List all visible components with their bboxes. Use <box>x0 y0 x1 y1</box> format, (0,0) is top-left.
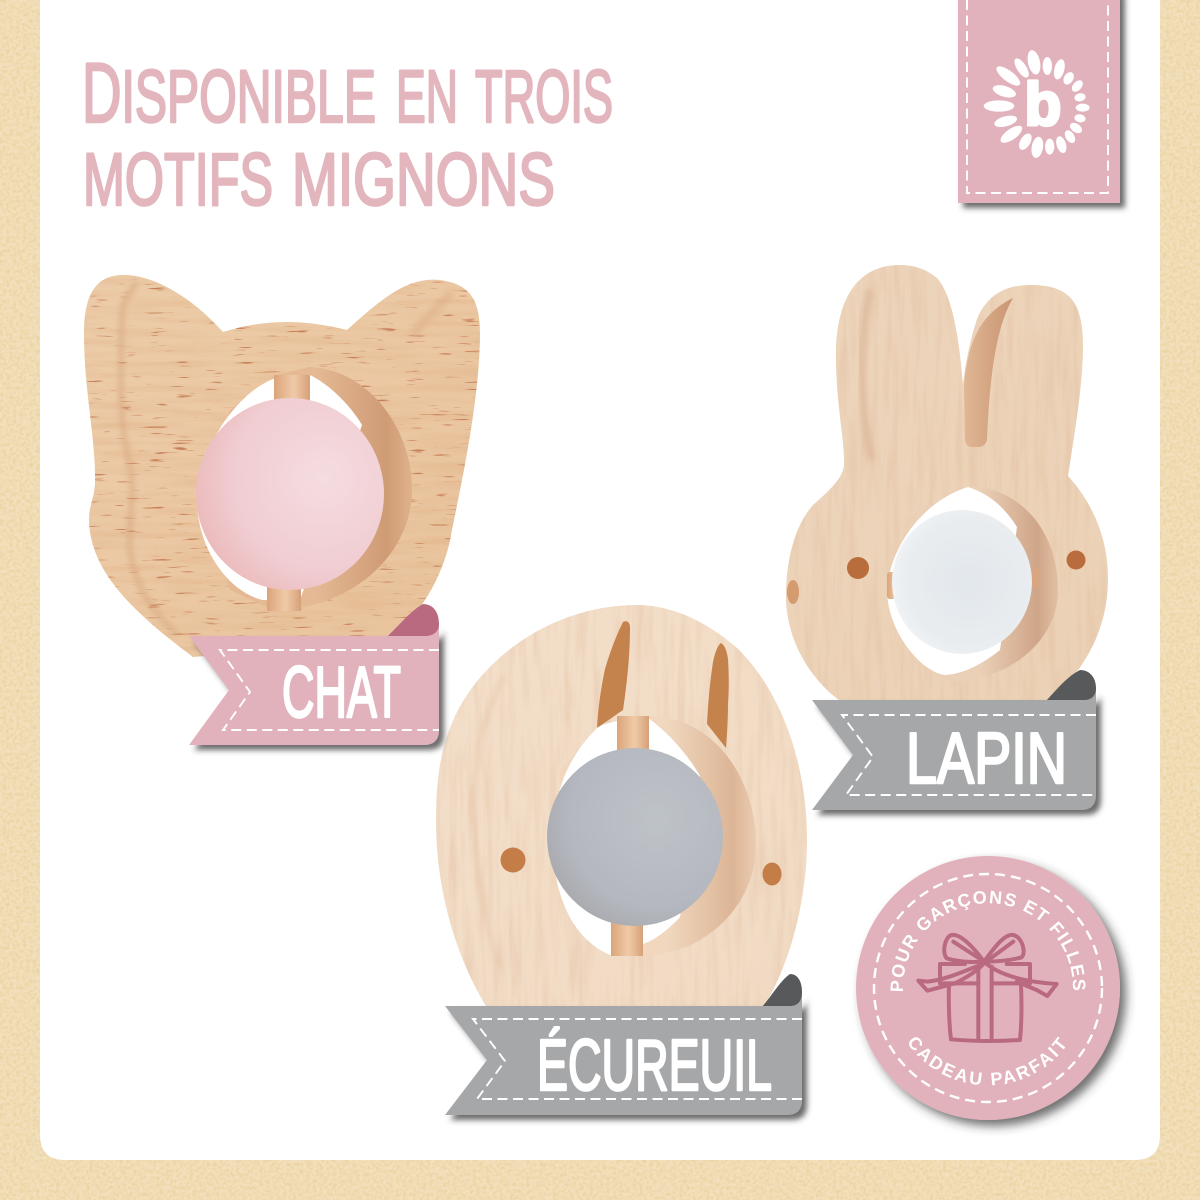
cat ear shading <box>412 292 452 335</box>
squirrel ball <box>547 748 723 926</box>
label: chat <box>189 604 439 745</box>
squirrel hole bevel <box>560 716 756 956</box>
label: lapin <box>812 670 1096 810</box>
ribbon fold <box>1046 670 1096 704</box>
badge: cadeau parfait <box>854 854 1134 1134</box>
ribbon fold <box>762 974 802 1008</box>
squirrel eyes <box>500 848 526 872</box>
product: rabbit rattle <box>786 265 1108 703</box>
label: lapin: LAPIN <box>906 719 1067 799</box>
product: cat rattle <box>84 275 480 657</box>
title: DISPONIBLE <box>82 46 376 140</box>
cat side edge shading <box>121 283 177 633</box>
squirrel rim <box>473 676 503 968</box>
title: MOTIFS <box>83 138 273 221</box>
ribbon fold <box>387 604 439 640</box>
cat ball <box>196 398 384 590</box>
product: squirrel rattle <box>436 605 807 1008</box>
squirrel ear marks <box>597 621 630 728</box>
ribbon <box>445 992 802 1115</box>
cat hole bevel <box>200 367 412 610</box>
logo tag <box>958 0 1120 203</box>
squirrel dowel <box>617 716 649 766</box>
label: chat: CHAT <box>282 653 401 733</box>
rabbit left ear shading <box>862 290 872 460</box>
title: MIGNONS <box>292 138 555 221</box>
ribbon <box>189 624 439 745</box>
squirrel hole opening <box>553 718 700 955</box>
icon: gift <box>918 935 1057 1041</box>
title: TROIS <box>475 55 613 138</box>
icon: brand logo <box>984 49 1090 159</box>
badge bottom text: CADEAU PARFAIT <box>909 1036 1066 1086</box>
ribbon <box>812 688 1096 810</box>
icon: brand logo: b <box>1025 71 1061 138</box>
rabbit ball <box>892 510 1032 654</box>
title <box>82 46 613 221</box>
rabbit dowel <box>887 572 905 599</box>
rabbit hole opening <box>887 487 1017 675</box>
cat hole opening <box>197 375 362 600</box>
rabbit ear slot <box>964 298 1013 447</box>
cat dowel <box>274 375 310 415</box>
label: ecureuil <box>445 974 802 1115</box>
label: ecureuil: ÉCUREUIL <box>537 1026 772 1106</box>
rabbit eyes <box>847 557 869 579</box>
title: EN <box>396 55 458 138</box>
rabbit hole bevel <box>885 486 1058 681</box>
badge top text: POUR GARÇONS ET FILLES <box>890 890 1086 992</box>
